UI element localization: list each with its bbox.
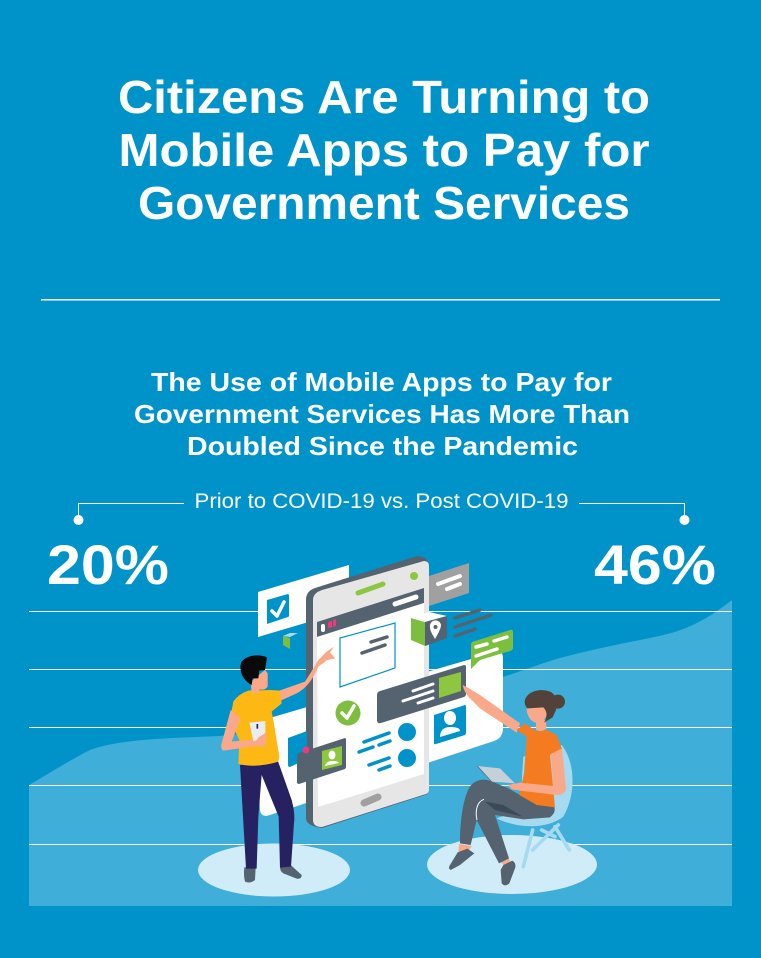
man with phone bbox=[221, 647, 335, 883]
dark profile card bbox=[297, 738, 346, 784]
area chart bbox=[29, 600, 732, 906]
title: Government Services bbox=[138, 177, 630, 229]
title bbox=[118, 71, 650, 229]
subtitle bbox=[134, 367, 630, 461]
subtitle: Government Services Has More Than bbox=[134, 399, 630, 429]
dark content card bbox=[377, 665, 466, 723]
subtitle: The Use of Mobile Apps to Pay for bbox=[151, 367, 612, 397]
woman on chair with laptop bbox=[449, 685, 573, 885]
smartphone bbox=[306, 556, 429, 828]
small floating cube bbox=[283, 633, 298, 649]
location text lines bbox=[455, 610, 491, 636]
stat: 20% prior: 20% bbox=[47, 533, 169, 596]
map pin cube bbox=[411, 612, 447, 646]
stat: 46% post: 46% bbox=[594, 533, 716, 596]
green chat bubble bbox=[471, 630, 513, 669]
legend: prior vs post COVID-19: Prior to COVID-19 vs. Post COVID-19 bbox=[194, 490, 568, 513]
portrait card bbox=[434, 705, 466, 744]
large back panel bbox=[256, 652, 503, 816]
title: Mobile Apps to Pay for bbox=[118, 124, 650, 176]
grey message card bbox=[429, 563, 469, 606]
checkbox card bbox=[258, 565, 349, 637]
blue card left bbox=[288, 731, 307, 767]
subtitle: Doubled Since the Pandemic bbox=[187, 431, 578, 461]
legend: prior vs post COVID-19 bbox=[74, 490, 690, 525]
ground ellipse left bbox=[198, 844, 350, 896]
ground ellipse right bbox=[427, 835, 597, 894]
title: Citizens Are Turning to bbox=[118, 71, 650, 123]
